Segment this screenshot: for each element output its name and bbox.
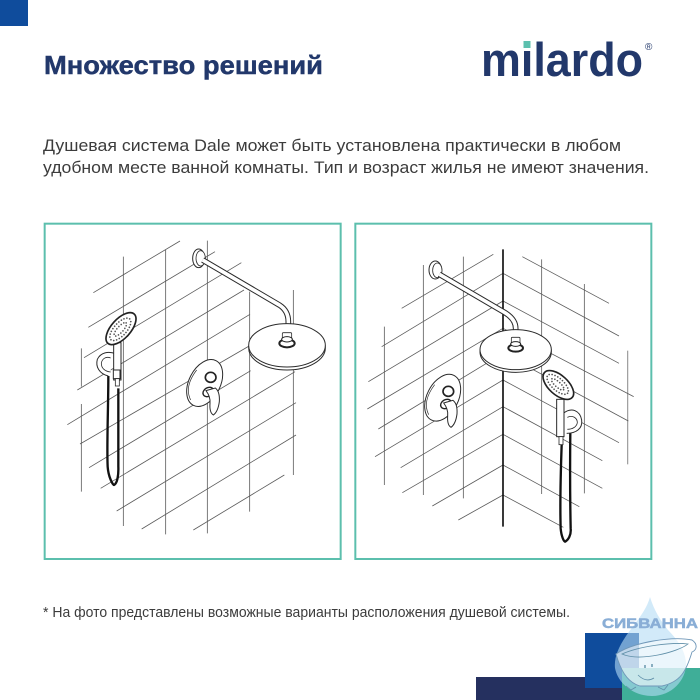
footnote: * На фото представлены возможные варианты расположения душевой системы. xyxy=(43,605,570,621)
rain shower head xyxy=(480,330,551,372)
mixer with lever xyxy=(179,354,230,415)
mixer with lever xyxy=(417,368,468,427)
panel: straight wall installation xyxy=(45,224,341,559)
hand shower with holder and hose xyxy=(97,308,141,485)
milardo logo: ® xyxy=(645,42,653,53)
watermark: СИБВАННА drop and bathtub xyxy=(602,597,698,696)
drop xyxy=(615,597,686,696)
title: Множество решений xyxy=(44,50,323,80)
tile grid: corner walls xyxy=(367,254,634,527)
bottom colour blocks xyxy=(476,633,700,700)
shower arm xyxy=(193,249,288,332)
bathtub rim and face xyxy=(622,643,688,690)
rain shower head xyxy=(249,324,325,370)
wall corner line xyxy=(500,249,505,527)
intro text: удобном месте ванной комнаты. Тип и возраст жилья не имеют значения. xyxy=(43,158,649,177)
bathtub xyxy=(616,639,696,686)
milardo logo: milardo xyxy=(481,33,643,86)
shower arm xyxy=(429,261,516,337)
hand shower with holder and hose xyxy=(538,365,582,542)
tile grid: flat wall xyxy=(67,241,296,534)
corner accent square xyxy=(0,0,28,26)
panel: corner installation xyxy=(355,224,651,559)
brand text: СИБВАННА xyxy=(602,615,698,631)
intro text: Душевая система Dale может быть установлена практически в любом xyxy=(43,136,621,155)
intro text xyxy=(43,136,649,177)
